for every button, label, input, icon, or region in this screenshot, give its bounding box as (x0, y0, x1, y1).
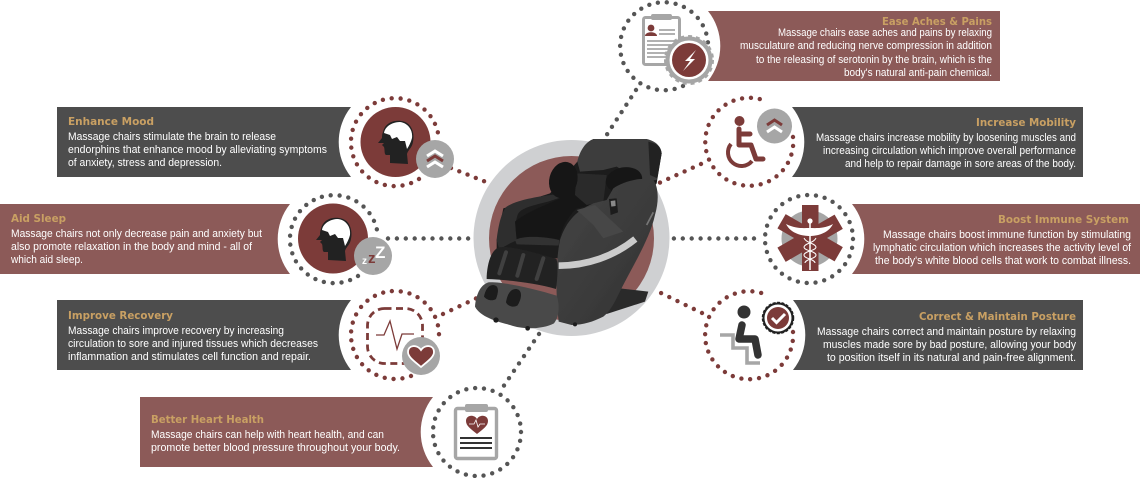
sleep badge (354, 237, 392, 275)
panel background (0, 204, 290, 274)
dotted ring (705, 98, 793, 186)
icon: clipboard and lightning badge (620, 2, 713, 90)
body text: body's natural anti-pain chemical. (844, 67, 992, 79)
connector: ease aches to chair (606, 90, 636, 136)
body text (740, 27, 992, 79)
panel: ease aches & pains (708, 11, 1000, 81)
maroon backdrop circle (489, 156, 654, 321)
body text: Massage chairs stimulate the brain to release (68, 131, 276, 143)
body text: Massage chairs boost immune function by stimulating (883, 229, 1131, 241)
pulse line (376, 321, 414, 349)
clipboard (644, 14, 680, 64)
body text: promote better blood pressure throughout your body. (151, 442, 400, 454)
connector: improve recovery to chair (443, 298, 477, 314)
body text: inflammation and stimulates cell function and repair. (68, 351, 311, 363)
heading: Correct & Maintain Posture (919, 310, 1076, 323)
panel: improve recovery (57, 300, 351, 370)
icon: head with brain and chevrons (351, 98, 454, 186)
maroon disc (298, 204, 368, 274)
body text (151, 429, 400, 454)
dotted ring (290, 195, 377, 283)
body text: and help to repair damage in sore areas of the body. (845, 158, 1076, 170)
body text: Massage chairs correct and maintain posture by relaxing (817, 326, 1076, 338)
heading: Enhance Mood (68, 115, 154, 128)
connector: aid sleep to chair (388, 236, 470, 241)
dotted ring (351, 291, 439, 379)
body text: lymphatic circulation which increases the activity level of (873, 242, 1132, 254)
dotted ring (433, 388, 521, 476)
panel background (57, 300, 351, 370)
dashed inner frame (368, 308, 422, 364)
panel background (852, 204, 1140, 274)
body text: Massage chairs improve recovery by increasing (68, 325, 284, 337)
chevron badge (416, 140, 454, 178)
body text (10, 228, 262, 266)
body text: increasing circulation which improve overall performance (823, 145, 1076, 157)
body text (817, 326, 1076, 364)
body text: Massage chairs ease aches and pains by relaxing (778, 27, 992, 39)
star of life (777, 205, 843, 271)
panel background (793, 300, 1083, 370)
body text: to the releasing of serotonin by the brain, which is the (756, 54, 992, 66)
grey backdrop circle (474, 140, 670, 336)
connector: increase mobility to chair (659, 164, 701, 183)
heading: Boost Immune System (998, 213, 1129, 226)
icon: heart health clipboard (433, 388, 521, 476)
central chair illustration (474, 139, 670, 336)
panel background (140, 397, 433, 467)
heading: Increase Mobility (976, 116, 1076, 129)
gear badge (665, 36, 713, 84)
head silhouette (316, 218, 352, 261)
massage chair (475, 139, 662, 331)
sleep badge: Z (375, 243, 385, 262)
grey disc (782, 210, 838, 266)
head silhouette (378, 121, 414, 164)
body text: Massage chairs not only decrease pain and anxiety but (11, 228, 262, 240)
body text (816, 132, 1076, 170)
heart badge (402, 337, 440, 375)
body text (68, 325, 318, 363)
connector: posture to chair (661, 293, 702, 313)
body text: of anxiety, stress and depression. (68, 157, 222, 169)
panel: increase mobility (792, 107, 1083, 177)
body text: which aid sleep. (10, 254, 83, 266)
icon: seated person with check badge (705, 291, 794, 379)
dotted ring (705, 291, 793, 379)
body text: Massage chairs can help with heart health, and can (151, 429, 384, 441)
body text (68, 131, 327, 169)
icon: head with brain and sleep badge (290, 195, 392, 283)
panel: correct & maintain posture (793, 300, 1083, 370)
clipboard (456, 404, 496, 458)
connector: enhance mood to chair (451, 168, 486, 182)
icon: wheelchair with chevrons (705, 98, 793, 186)
sleep badge: z (362, 256, 367, 267)
caduceus (786, 218, 833, 270)
check badge (762, 302, 794, 334)
panel background (57, 107, 351, 177)
panel: aid sleep (0, 204, 290, 274)
body text: also promote relaxation in the body and mind - all of (11, 241, 253, 253)
panel: better heart health (140, 397, 433, 467)
wheelchair (728, 116, 763, 166)
body text: endorphins that enhance mood by alleviating symptoms (68, 144, 327, 156)
panel: enhance mood (57, 107, 351, 177)
panel: boost immune system (852, 204, 1140, 274)
body text: to position itself in its natural and pain-free alignment. (827, 352, 1076, 364)
heading: Better Heart Health (151, 413, 264, 426)
dotted ring (351, 98, 438, 186)
text lines (460, 438, 492, 448)
body text: musculature and reducing nerve compression in addition (740, 40, 992, 52)
heart with pulse (466, 416, 488, 434)
body text: circulation to sore and injured tissues which decreases (68, 338, 318, 350)
heading: Improve Recovery (68, 309, 173, 322)
maroon disc (360, 107, 430, 177)
connector: better heart health to chair (503, 334, 539, 387)
body text: muscles made sore by bad posture, allowing your body (823, 339, 1076, 351)
stairs (720, 335, 760, 363)
connector: boost immune to chair (673, 236, 754, 241)
heading: Aid Sleep (11, 212, 66, 225)
dotted ring (620, 2, 708, 90)
body text: the body's white blood cells that work to combat illness. (875, 255, 1131, 267)
sleep badge: z (368, 250, 376, 267)
panel background (708, 11, 1000, 81)
chevron badge (757, 108, 792, 144)
body text (873, 229, 1132, 267)
body text: Massage chairs increase mobility by loosening muscles and (816, 132, 1076, 144)
icon: star of life with caduceus (765, 195, 853, 283)
icon: pulse and heart badge (351, 291, 440, 379)
dotted ring (765, 195, 853, 283)
seated person (738, 306, 758, 355)
heading: Ease Aches & Pains (882, 15, 992, 28)
panel background (792, 107, 1083, 177)
